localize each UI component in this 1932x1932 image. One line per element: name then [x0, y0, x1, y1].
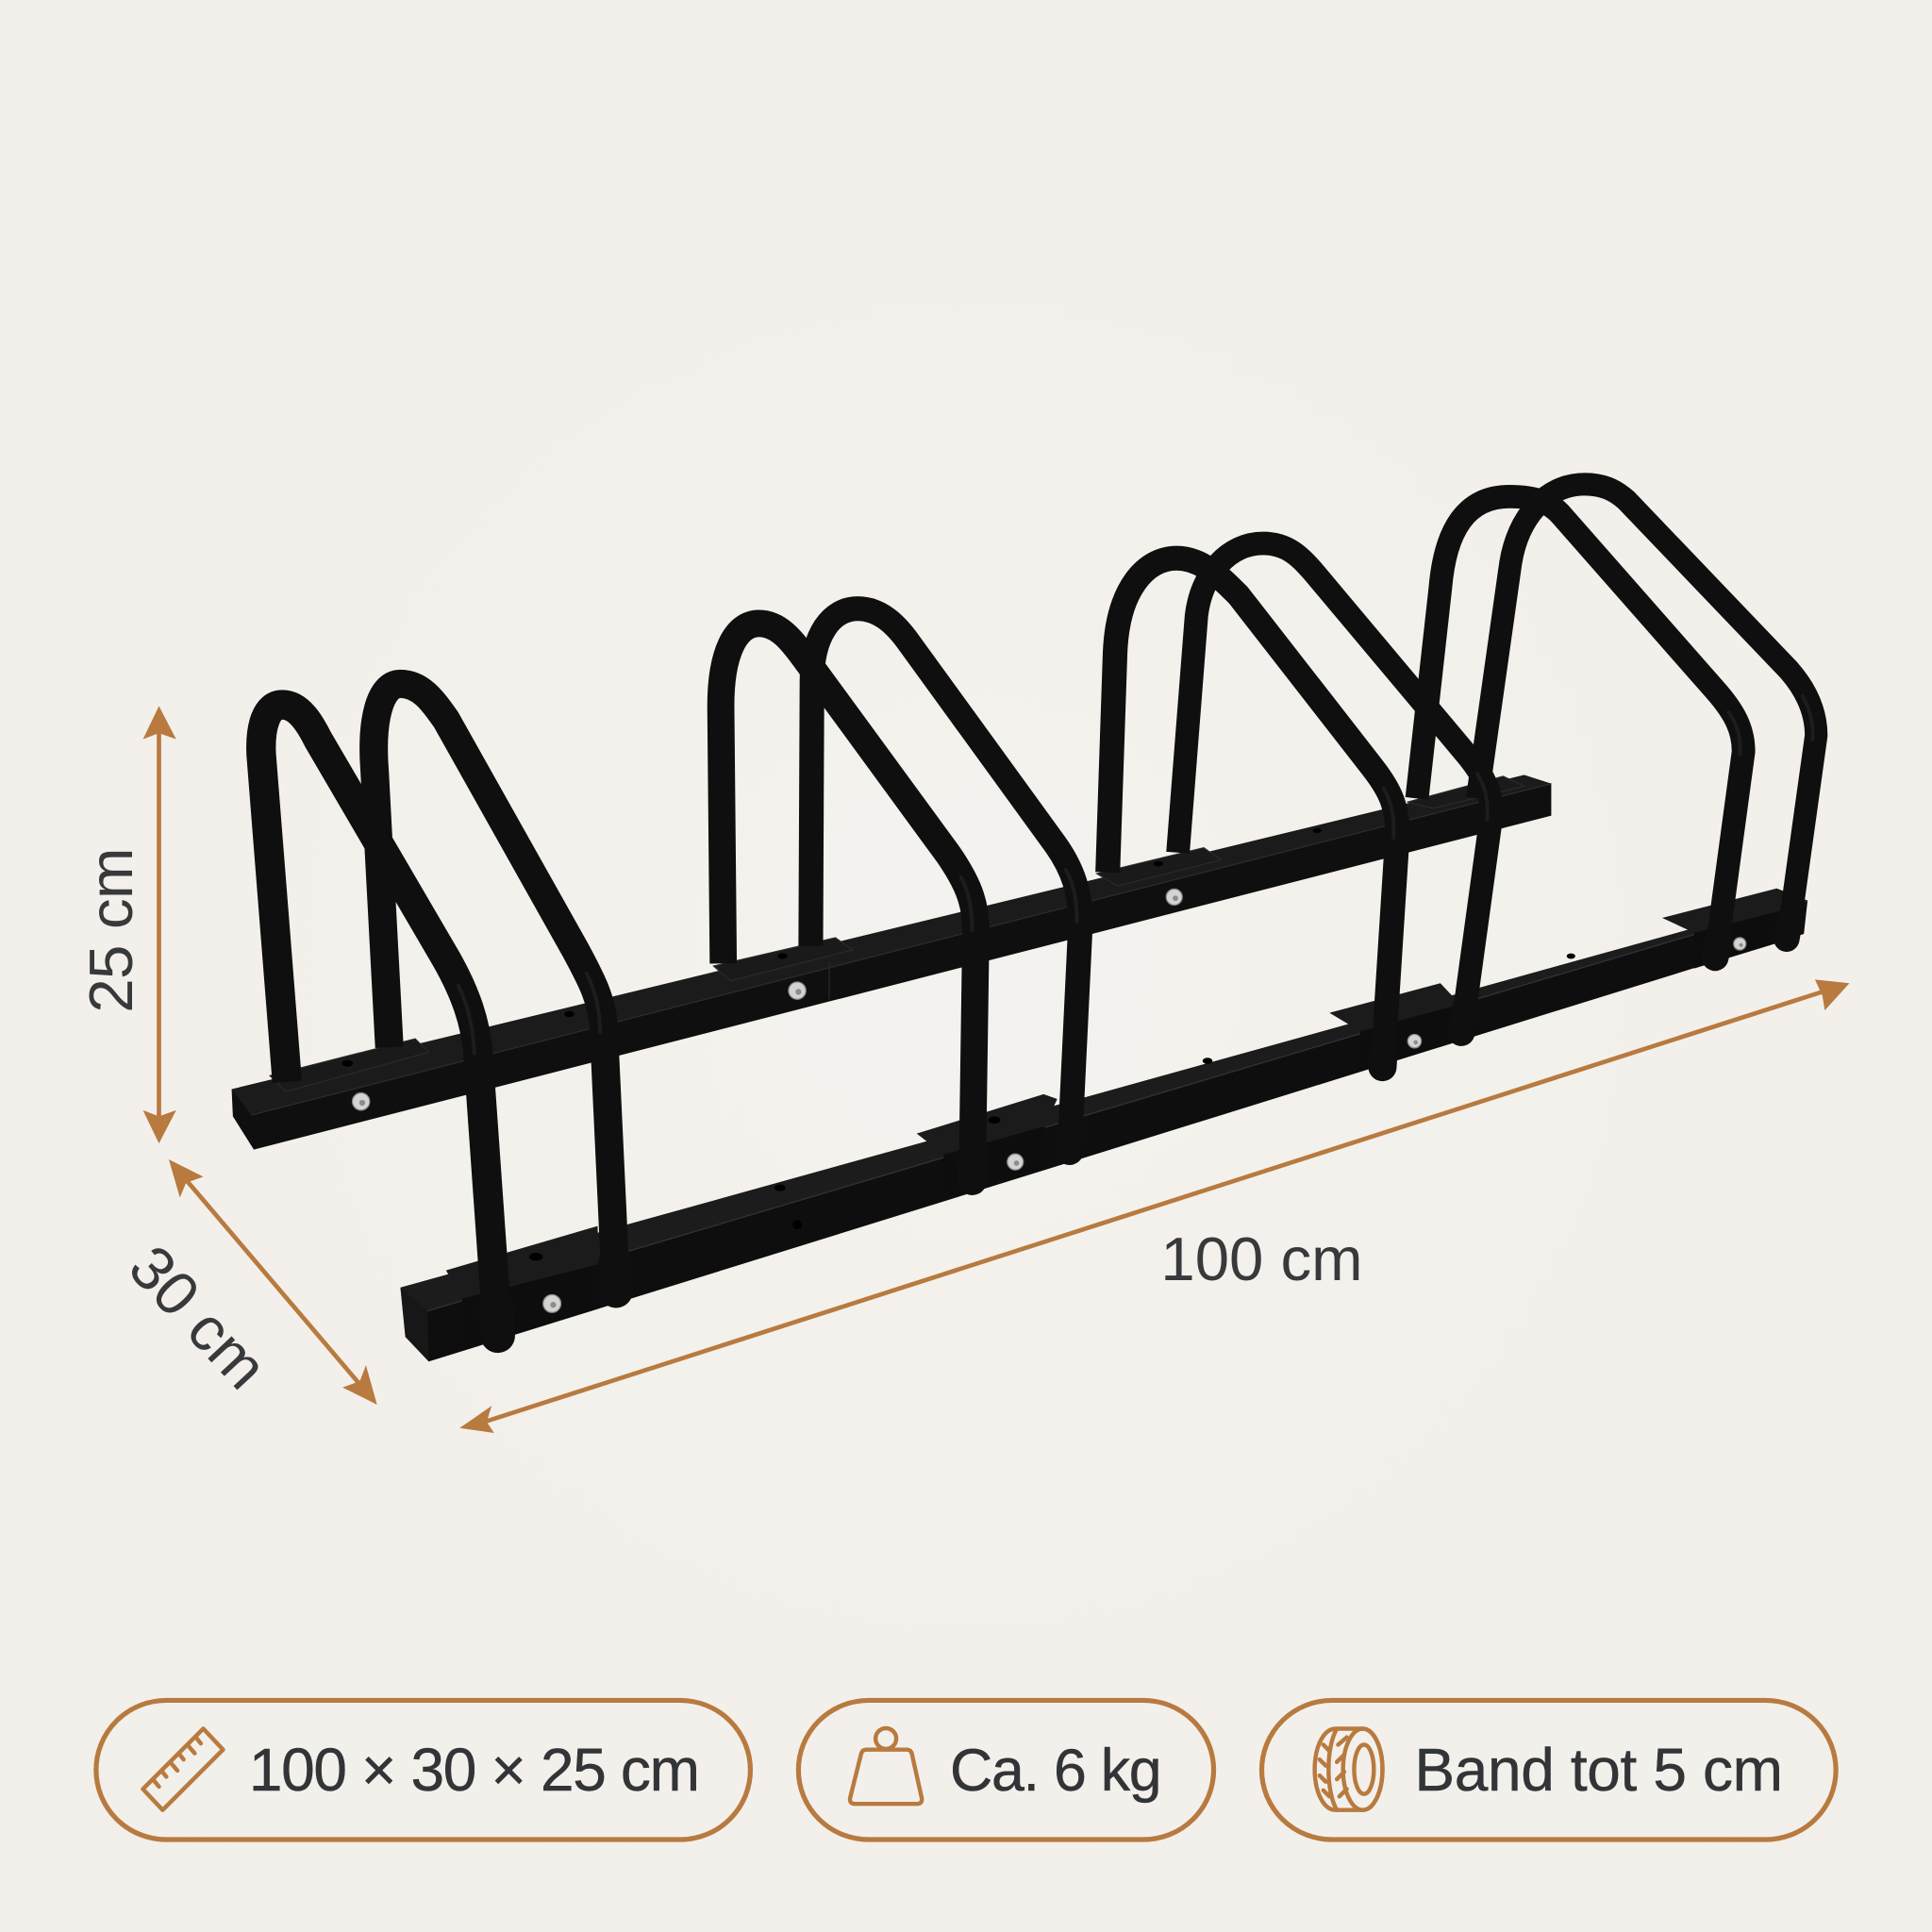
- text: overall size: 100 × 30 × 25 cm: [249, 1736, 700, 1804]
- spec pill: tyre width: [1261, 1700, 1836, 1840]
- arrow: depth 30 cm: [169, 1159, 377, 1405]
- front bar: [400, 898, 1807, 1361]
- label: 100 cm: 100 cm: [1160, 1224, 1363, 1293]
- plate holes: [341, 861, 1163, 1260]
- arch pair 3: [1108, 543, 1491, 1070]
- arch pair 1: [261, 684, 616, 1336]
- front mounting plates: [446, 889, 1799, 1349]
- icon: kettle weight: [850, 1728, 922, 1804]
- label: 25 cm: 25 cm: [76, 848, 145, 1013]
- spec pill: weight: [798, 1700, 1214, 1840]
- arch pair 2: [721, 608, 1080, 1183]
- arrow: length 100 cm: [459, 979, 1849, 1433]
- icon: tyre: [1315, 1728, 1382, 1810]
- rear mounting plates: [270, 776, 1524, 1091]
- bike rack product illustration: [232, 484, 1816, 1361]
- spec pill: dimensions: [96, 1700, 750, 1840]
- arch pair 4: [1417, 484, 1816, 961]
- text: weight: Ca. 6 kg: [950, 1738, 1162, 1804]
- rear bar: [232, 775, 1551, 1150]
- text: tyre width: Band tot 5 cm: [1414, 1736, 1783, 1804]
- bolts: [353, 889, 1746, 1312]
- icon: ruler: [143, 1728, 223, 1810]
- arrow: height 25 cm: [143, 706, 176, 1143]
- label: 30 cm: 30 cm: [116, 1232, 281, 1402]
- bolt centres: [359, 895, 1743, 1307]
